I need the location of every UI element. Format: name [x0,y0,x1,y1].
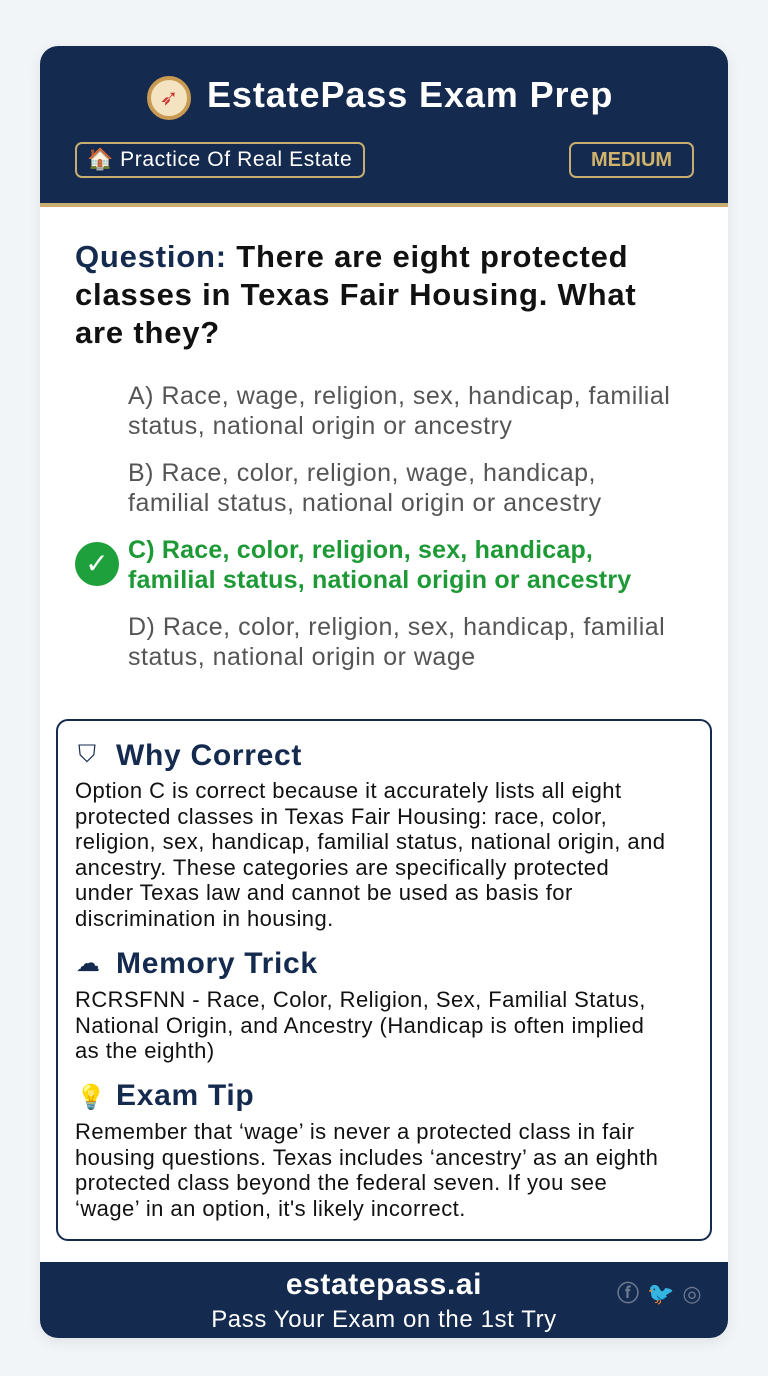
option D: D) Race, color, religion, sex, handicap, familial [128,613,665,641]
icon: brain: ☁ [76,950,100,977]
icon: compass: ➶ [160,85,178,110]
header [40,46,728,207]
option C correct [128,536,631,594]
text: why correct: religion, sex, handicap, familial status, national origin, and [75,829,665,854]
text: exam tip: protected class beyond the federal seven. If you see [75,1170,607,1195]
category badge [75,142,365,178]
text: exam tip [75,1119,658,1220]
heading: why correct: Why Correct [116,739,302,772]
social icons: ⓕ🐦◎ [617,1281,710,1306]
option B [128,459,602,517]
icon: bulb: 💡 [76,1084,106,1111]
icon: shield: ⛉ [78,741,96,768]
text: memory trick: National Origin, and Ancestry (Handicap is often implied [75,1012,644,1038]
option A: A) Race, wage, religion, sex, handicap, familial [128,382,670,410]
explanation panel [56,719,712,1241]
difficulty badge [569,142,694,178]
question: are they? [75,315,220,350]
question: Question: There are eight protected [75,239,628,274]
text: exam tip: housing questions. Texas includes ‘ancestry’ as an eighth [75,1144,658,1170]
text: memory trick: RCRSFNN - Race, Color, Religion, Sex, Familial Status, [75,987,646,1012]
text: memory trick [75,987,646,1063]
heading: exam tip: Exam Tip [116,1079,254,1112]
difficulty badge: MEDIUM [591,149,672,171]
option C correct: C) Race, color, religion, sex, handicap, [128,536,593,564]
option A: status, national origin or ancestry [128,412,512,440]
category badge: 🏠 Practice Of Real Estate [87,148,352,171]
text: why correct: Option C is correct because it accurately lists all eight [75,778,622,803]
text: why correct [75,778,665,930]
heading: memory trick: Memory Trick [116,947,318,980]
question [75,239,636,350]
text: why correct: ancestry. These categories are specifically protected [75,854,609,880]
text: memory trick: as the eighth) [75,1038,215,1063]
title: EstatePass Exam Prep [207,74,613,115]
option D: status, national origin or wage [128,643,476,671]
icon: check: ✓ [85,548,109,579]
footer site: estatepass.ai [286,1268,482,1301]
icon: check [75,542,119,586]
option D [128,613,665,671]
question: classes in Texas Fair Housing. What [75,277,636,312]
footer [40,1262,728,1338]
text: why correct: protected classes in Texas Fair Housing: race, color, [75,804,607,828]
text: why correct: discrimination in housing. [75,906,334,930]
option B: B) Race, color, religion, wage, handicap, [128,459,596,487]
text: exam tip: Remember that ‘wage’ is never a protected class in fair [75,1119,635,1144]
text: exam tip: ‘wage’ in an option, it's likely incorrect. [75,1196,466,1220]
footer tagline: Pass Your Exam on the 1st Try [211,1306,557,1333]
text: why correct: under Texas law and cannot be used as basis for [75,880,573,905]
icon: compass [147,76,191,120]
option C correct: familial status, national origin or ancestry [128,566,631,594]
option B: familial status, national origin or ancestry [128,489,602,517]
option A [128,382,670,440]
